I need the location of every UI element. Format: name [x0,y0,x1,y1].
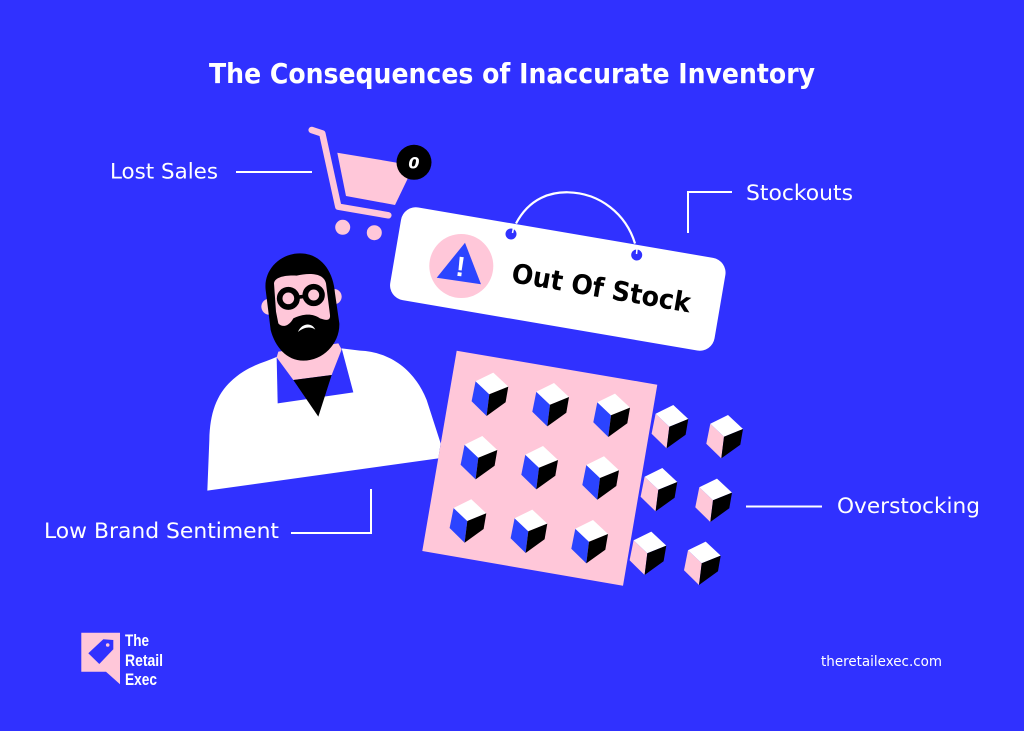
logo [81,631,163,689]
overflowing boxes [630,405,743,585]
title: The Consequences of Inaccurate Inventory [209,58,815,90]
label: low brand sentiment: Low Brand Sentiment [44,519,279,544]
man illustration [207,253,441,491]
label: stockouts [688,181,853,233]
label: overstocking: Overstocking [837,494,980,519]
icon: warning: ! [454,251,467,283]
inventory panel with boxes [422,351,657,586]
logo: Exec [125,670,157,689]
logo: Retail [125,651,163,670]
website url: theretailexec.com [821,654,942,670]
icon: warning [429,234,493,298]
logo: The [125,631,149,650]
out of stock sign [388,192,728,353]
label: lost sales: Lost Sales [110,160,218,184]
label: stockouts: Stockouts [746,181,853,206]
icon: shopping cart [312,130,432,240]
sign text: Out Of Stock [509,258,694,320]
icon: shopping cart: 0 [408,154,420,172]
label: low brand sentiment [44,489,371,544]
